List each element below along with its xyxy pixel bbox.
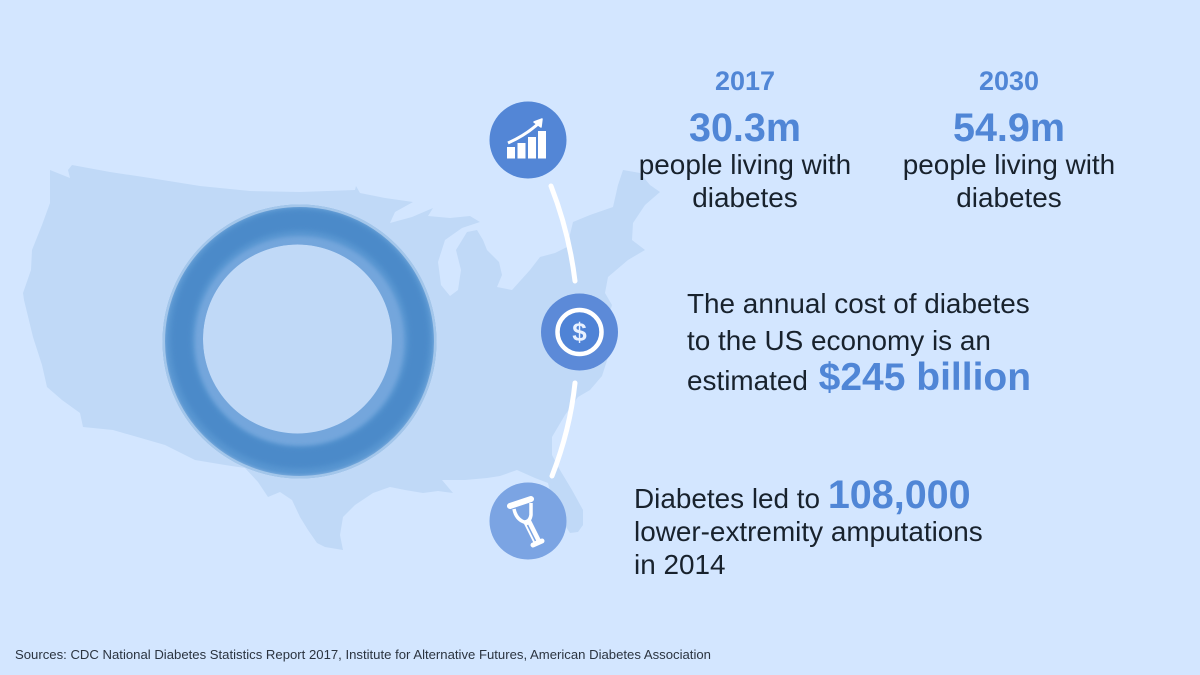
text block: amputations: Diabetes led to 108,000	[634, 473, 971, 517]
icon: dollar coin: $	[572, 317, 587, 347]
stat: 2030	[903, 66, 1115, 213]
text block: annual cost: to the US economy is an	[687, 325, 991, 356]
timeline arc: bottom segment	[552, 383, 575, 476]
stat: 2030: 2030	[979, 66, 1039, 96]
text block: amputations: in 2014	[634, 549, 726, 580]
text block: amputations: lower-extremity amputations	[634, 516, 983, 547]
stat: 2030: 54.9m	[953, 106, 1065, 150]
stat: 2017: people living with	[639, 149, 851, 180]
diabetes awareness ring	[164, 206, 436, 478]
icon: dollar coin	[541, 294, 618, 370]
stat: 2030: people living with	[903, 149, 1115, 180]
stat: 2017: 2017	[715, 66, 775, 96]
main graphic: map, ring, timeline	[23, 102, 660, 560]
timeline arc: top segment	[551, 186, 575, 281]
text block: amputations	[634, 473, 983, 580]
stat: 2017	[639, 66, 851, 213]
map of the United States	[23, 165, 660, 550]
stat: 2017: diabetes	[692, 182, 798, 213]
text block: annual cost	[687, 288, 1031, 399]
stat: 2030: diabetes	[956, 182, 1062, 213]
text block: annual cost: The annual cost of diabetes	[687, 288, 1030, 319]
icon: crutch	[490, 482, 566, 560]
stat: 2017: 30.3m	[689, 106, 801, 150]
text block: annual cost: estimated $245 billion	[687, 356, 1031, 399]
sources footnote: Sources: CDC National Diabetes Statistics Report 2017, Institute for Alternative Futures, American Diabetes Association	[15, 647, 711, 662]
icon: rising bar chart	[490, 102, 566, 178]
